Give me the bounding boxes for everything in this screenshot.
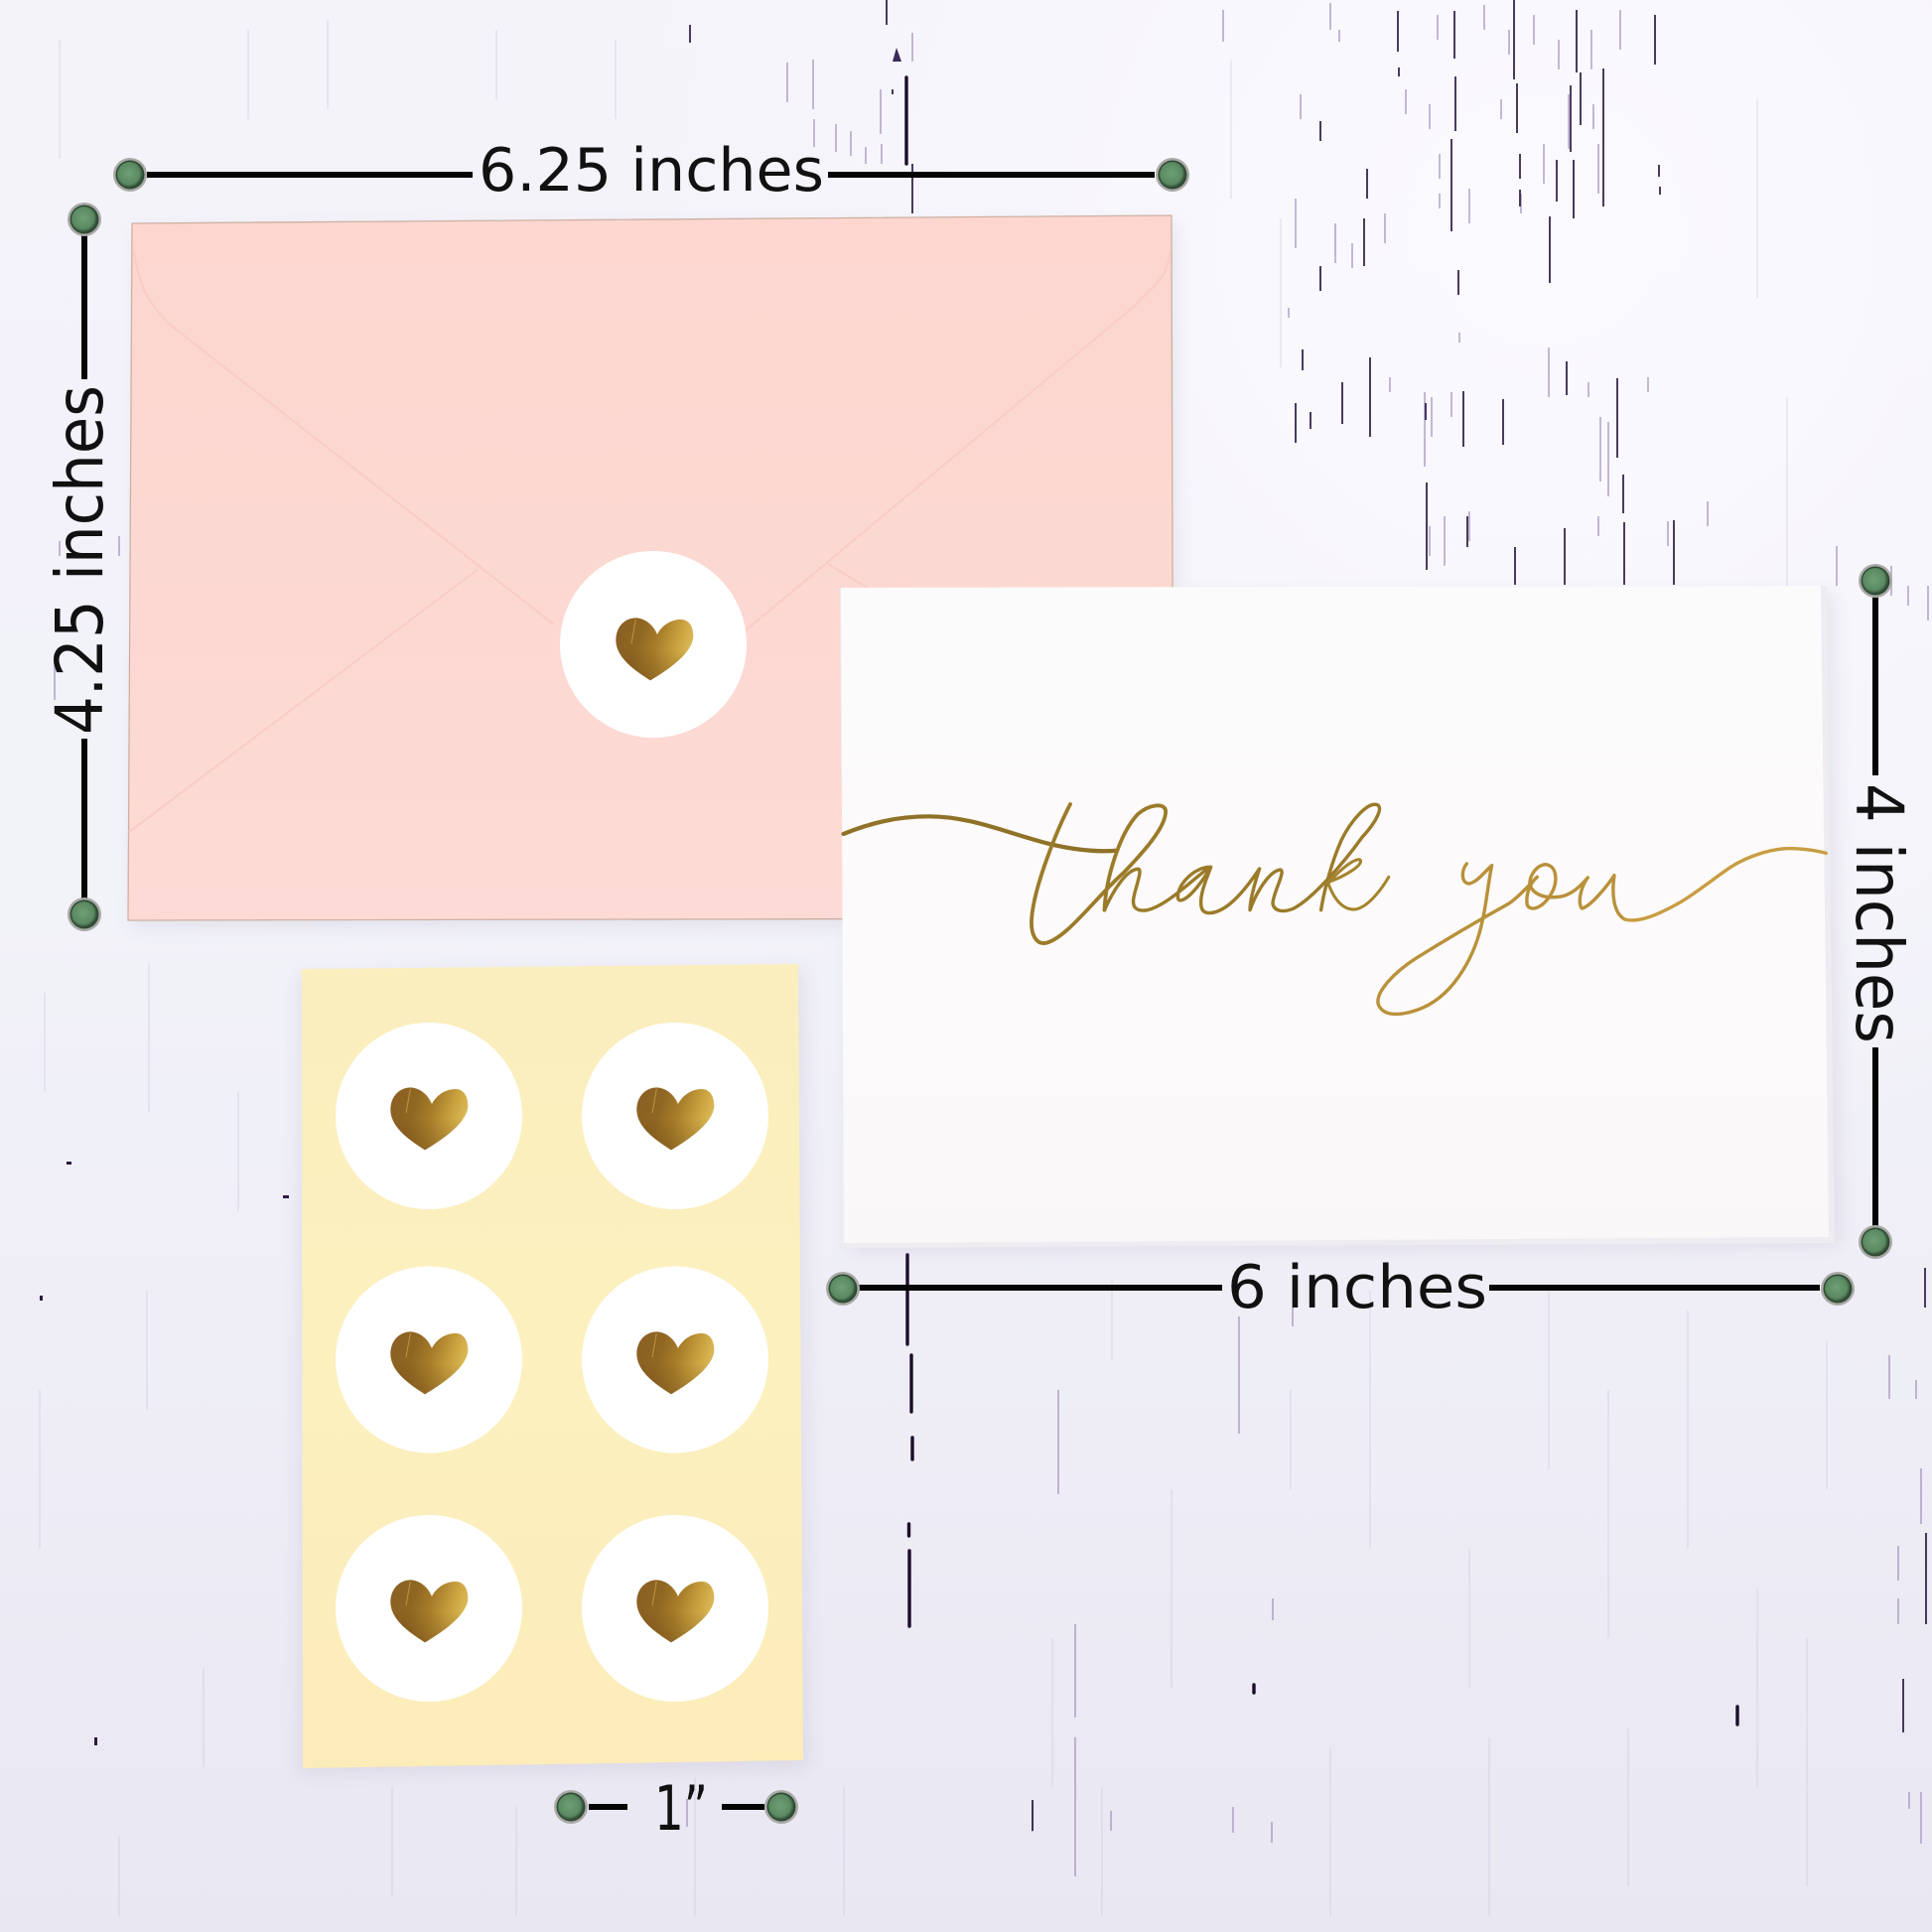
sticker row 2 left bbox=[336, 1267, 522, 1453]
envelope body bbox=[128, 215, 1173, 920]
pin: height top bbox=[68, 203, 101, 236]
pin: height bottom bbox=[68, 897, 101, 931]
pin: card height bottom bbox=[1859, 1225, 1892, 1259]
panel: yellow sticker sheet bbox=[302, 964, 803, 1768]
gold thank you lettering bbox=[844, 804, 1826, 1014]
soft shadows under stationery bbox=[133, 222, 1841, 1775]
envelope flap folds bbox=[129, 247, 1171, 832]
card front bbox=[841, 586, 1829, 1243]
label: 4.25 inches: 4.25 inches bbox=[42, 385, 118, 735]
pin: card width left bbox=[826, 1272, 860, 1306]
label: 6 inches: 6 inches bbox=[1227, 1253, 1487, 1322]
label: 1 inch: 1” bbox=[654, 1772, 708, 1845]
card back layer bbox=[840, 586, 1835, 1248]
pin: sticker left bbox=[554, 1790, 588, 1824]
label: 6.25 inches: 6.25 inches bbox=[479, 136, 824, 206]
dimension: envelope width bbox=[113, 136, 1189, 206]
pin: card width right bbox=[1821, 1272, 1855, 1306]
sheet backing bbox=[302, 964, 803, 1768]
sticker row 1 right bbox=[582, 1023, 768, 1209]
dimension: sticker diameter bbox=[554, 1772, 798, 1845]
panel: pink envelope bbox=[128, 215, 1173, 920]
pin: width left bbox=[113, 158, 147, 192]
label: 4 inches: 4 inches bbox=[1841, 783, 1917, 1043]
dimension: card width bbox=[826, 1253, 1855, 1322]
sticker row 3 left bbox=[336, 1515, 522, 1702]
sticker row 1 left bbox=[336, 1023, 522, 1209]
panel: thank you card bbox=[840, 586, 1835, 1248]
dimension: envelope height bbox=[42, 203, 118, 931]
pin: width right bbox=[1156, 158, 1189, 192]
sticker row 3 right bbox=[582, 1515, 768, 1702]
dimension: card height bbox=[1841, 564, 1917, 1259]
pin: card height top bbox=[1859, 564, 1892, 598]
envelope heart seal sticker bbox=[560, 551, 747, 738]
pin: sticker right bbox=[764, 1790, 798, 1824]
sticker row 2 right bbox=[582, 1267, 768, 1453]
